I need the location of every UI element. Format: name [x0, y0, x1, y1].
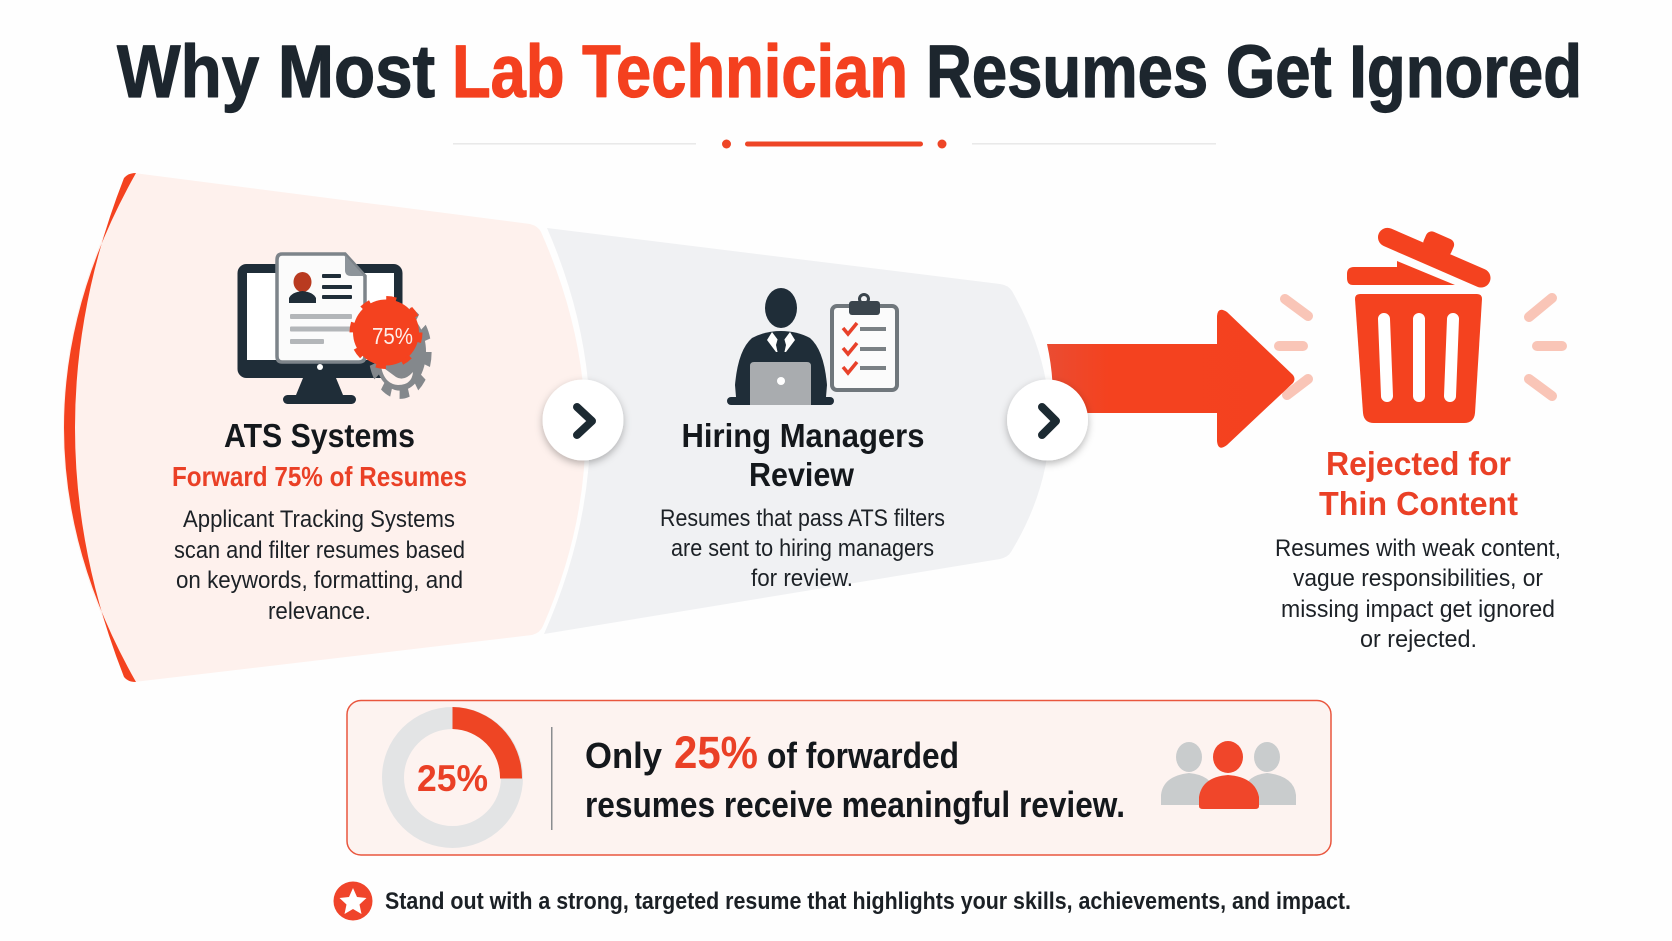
donut chart: 25% [393, 707, 522, 837]
callout text: Only [585, 735, 662, 776]
callout text: resumes receive meaningful review. [585, 784, 1125, 825]
callout text: of forwarded [767, 735, 959, 776]
callout text [585, 727, 1125, 825]
heading: Hiring Managers Review: Review [749, 456, 854, 493]
text: rejection description: missing impact get ignored [1281, 596, 1555, 623]
heading: ATS Systems: ATS Systems [224, 417, 415, 454]
text: ATS description: Applicant Tracking Systems [183, 506, 455, 533]
heading: Rejected for Thin Content [1319, 445, 1518, 522]
heading: Rejected for Thin Content: Rejected for [1326, 445, 1511, 482]
text: rejection description: or rejected. [1360, 626, 1477, 653]
panel: 25% callout [347, 700, 1331, 855]
text: hiring managers description [660, 505, 945, 592]
callout text: 25% [674, 727, 758, 778]
arrow: chevron button one [542, 380, 624, 460]
icon: rays around trash can [1279, 298, 1562, 396]
text: ATS description: scan and filter resumes based [174, 537, 465, 564]
heading: Hiring Managers Review [682, 417, 924, 493]
icon: manager at laptop [727, 288, 834, 405]
text: hiring managers description: Resumes that pass ATS filters [660, 505, 945, 532]
panel: rejected outcome [1275, 212, 1561, 653]
funnel left edge [64, 173, 136, 682]
panel: ATS systems funnel stage [63, 173, 586, 682]
panel: hiring managers funnel stage [544, 228, 1050, 634]
icon: star badge [334, 882, 372, 920]
icon: trash can [1347, 212, 1499, 423]
icon: gray gear [371, 310, 429, 394]
title: Resumes Get Ignored [926, 30, 1582, 113]
text: ATS description [174, 506, 465, 625]
heading: Hiring Managers Review: Hiring Managers [682, 417, 924, 454]
text: hiring managers description: for review. [751, 565, 853, 592]
text: ATS description: on keywords, formatting, and [176, 567, 463, 594]
icon: monitor with resume and gear: 75% [372, 323, 413, 349]
title: Lab Technician [452, 30, 908, 113]
donut chart: 25%: 25% [417, 758, 488, 799]
text: rejection description: Resumes with weak content, [1275, 535, 1561, 562]
title [117, 30, 1582, 113]
icon: red gear badge [352, 298, 420, 366]
text: ATS description: relevance. [268, 598, 371, 625]
arrow: chevron button two [1007, 380, 1088, 460]
text: rejection description [1275, 535, 1561, 653]
arrow: red flow arrow [1047, 310, 1294, 448]
subheading: Forward 75% of Resumes: Forward 75% of Resumes [172, 461, 467, 492]
text: rejection description: vague responsibilities, or [1293, 565, 1543, 592]
title: Why Most [117, 30, 435, 113]
footer tip text: Stand out with a strong, targeted resume that highlights your skills, achievements, and impact. [385, 888, 1351, 915]
icon: clipboard checklist [832, 294, 897, 390]
text: hiring managers description: are sent to hiring managers [671, 535, 934, 562]
icon: monitor with resume and gear [238, 254, 429, 404]
heading: Rejected for Thin Content: Thin Content [1319, 485, 1518, 522]
icon: people group [1161, 741, 1296, 809]
